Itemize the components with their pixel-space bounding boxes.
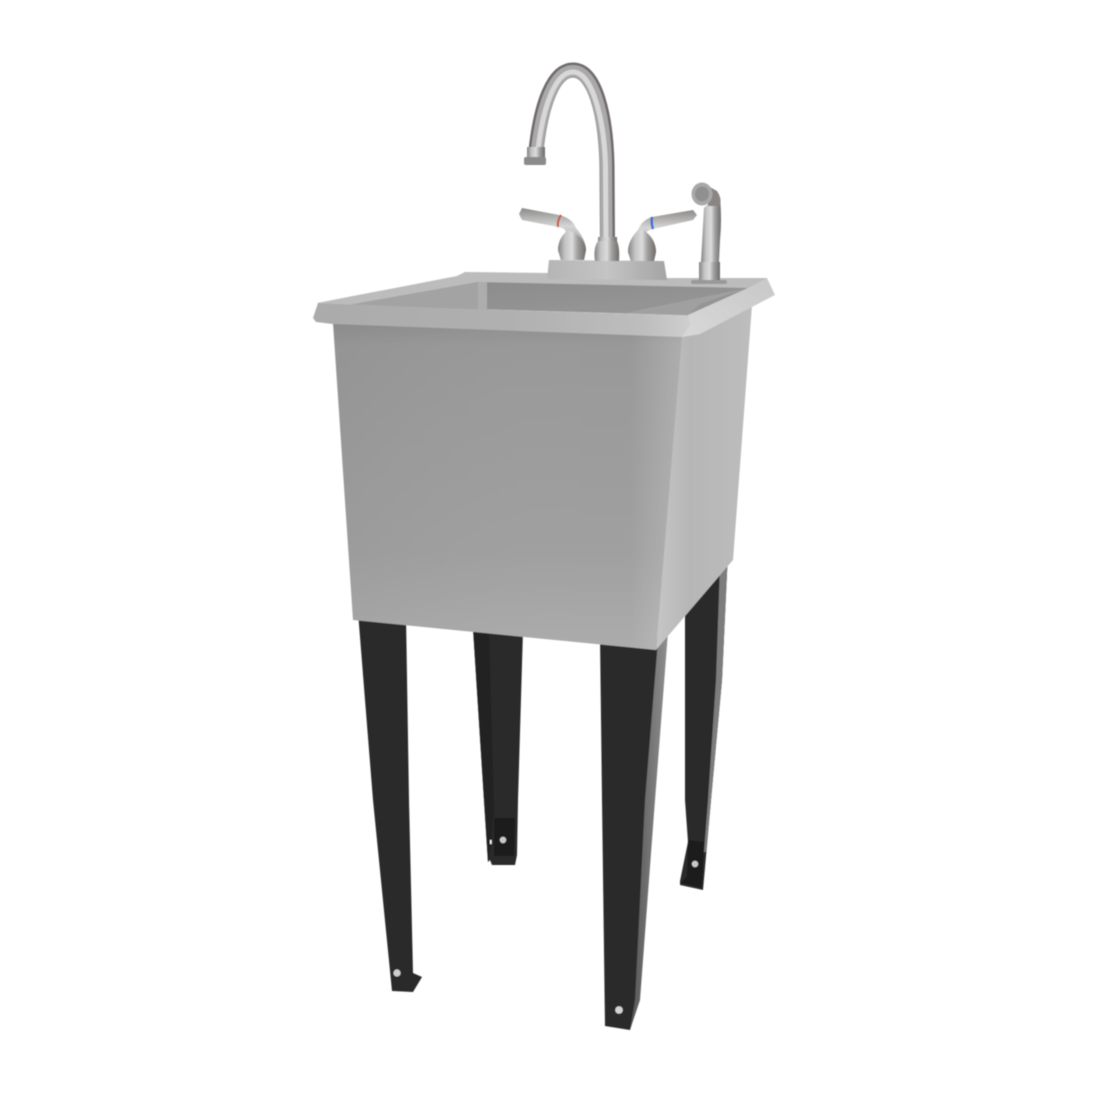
- faucet assembly: [519, 70, 727, 284]
- front left leg: [358, 612, 422, 992]
- cold handle with blue ring: [628, 210, 697, 261]
- rim back and top surface: [317, 272, 767, 316]
- tub right side wall: [656, 305, 752, 650]
- tub front wall: [333, 323, 682, 650]
- basin interior: [343, 282, 748, 315]
- faucet deck plate: [547, 260, 667, 280]
- center collar: [594, 237, 619, 261]
- tub: [313, 272, 775, 650]
- rim right lip: [682, 278, 775, 337]
- gooseneck spout: [536, 70, 608, 243]
- back middle leg: [473, 628, 523, 865]
- back right leg: [680, 552, 728, 890]
- front right leg: [600, 632, 668, 1030]
- hot handle with red ring: [519, 208, 586, 260]
- spout nozzle: [524, 147, 546, 165]
- rim front lip: [313, 303, 700, 337]
- side sprayer: [691, 182, 727, 284]
